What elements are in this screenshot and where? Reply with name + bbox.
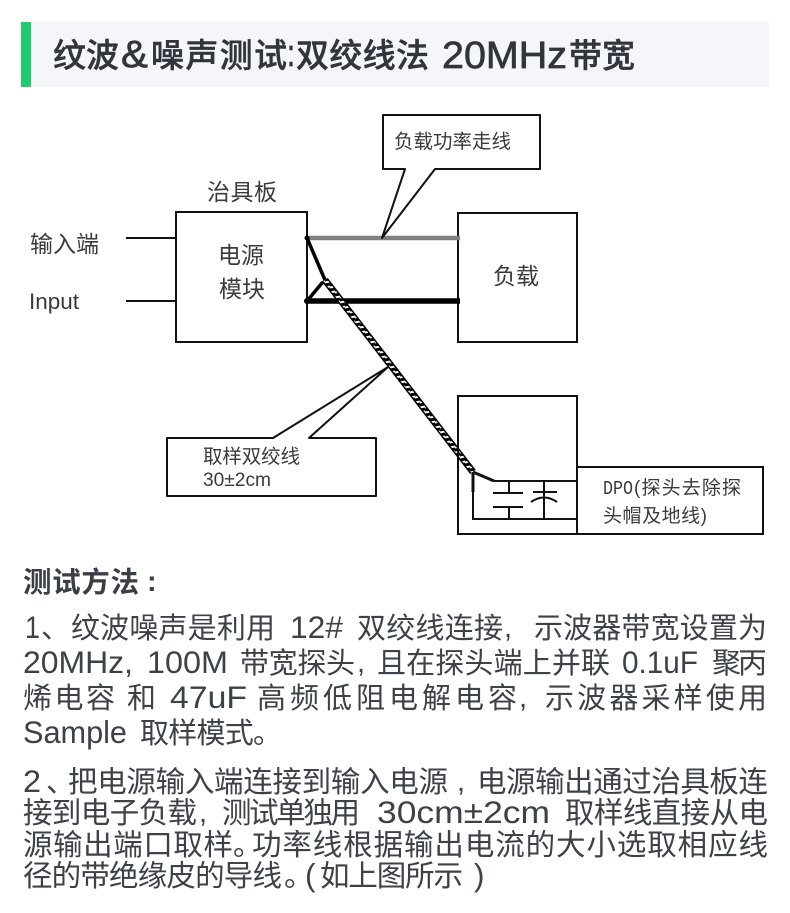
paragraph 2: 。 xyxy=(284,860,314,893)
box: load xyxy=(458,213,577,342)
paragraph 2: 、 xyxy=(46,767,75,799)
heading: test method: 测试方法 xyxy=(23,567,139,599)
paragraph 2: ) xyxy=(474,857,484,893)
paragraph 2: 接到电子负载 xyxy=(23,797,197,830)
box: DPO probe note: 头帽及地线) xyxy=(603,505,707,527)
paragraph 1: 带宽探头 xyxy=(240,647,355,680)
box: power module: 电源 xyxy=(218,242,264,268)
title banner: 带宽 xyxy=(569,37,635,74)
label: fixture board: 治具板 xyxy=(207,179,277,205)
paragraph 1: 100M xyxy=(147,644,228,680)
box: power module xyxy=(176,212,307,342)
paragraph 1: Sample xyxy=(23,714,127,750)
box: power module: 模块 xyxy=(219,276,265,302)
paragraph 2: 源输出端口取样 xyxy=(23,829,233,862)
title banner: 双绞线法 xyxy=(296,37,429,74)
paragraph 2: , xyxy=(199,797,207,829)
paragraph 1: 47uF xyxy=(170,679,247,715)
paragraph 2: 2 xyxy=(23,763,41,799)
callout: sampling twisted pair: 30±2cm xyxy=(203,470,271,491)
input wires xyxy=(126,238,176,301)
callout: sampling twisted pair: 取样双绞线 xyxy=(203,446,300,468)
title banner: 纹波 xyxy=(53,37,119,74)
capacitor circuit xyxy=(473,472,577,519)
box: DPO probe note: DPO xyxy=(603,478,633,500)
title banner xyxy=(21,22,769,87)
paragraph 1: 取样模式。 xyxy=(140,717,282,750)
paragraph 1: 1 xyxy=(25,609,40,645)
circuit diagram xyxy=(29,115,763,534)
paragraph 2: 。 xyxy=(233,829,263,862)
paragraph 1: 且在探头端上并联 xyxy=(377,647,610,680)
paragraph 1: 和 xyxy=(127,683,156,715)
paragraph 2: 取样线直接从电 xyxy=(565,797,768,830)
paragraph 2: 如上图所示 xyxy=(320,860,463,893)
paragraph 2: 径的带绝缘皮的导线 xyxy=(23,860,282,893)
paragraph 1: 聚丙 xyxy=(712,648,767,680)
paragraph 1: , xyxy=(504,612,512,644)
paragraph 2: ( xyxy=(305,857,316,893)
paragraph 2 xyxy=(23,763,768,893)
title banner: & xyxy=(121,34,148,76)
paragraph 2: , xyxy=(457,766,465,798)
paragraph 1: 双绞线连接 xyxy=(357,612,503,645)
paragraph 1: 纹波噪声是利用 xyxy=(71,612,275,645)
paragraph 2: 测试单独用 xyxy=(222,797,360,830)
label: input end: 输入端 xyxy=(30,231,99,257)
heading: test method: : xyxy=(147,566,157,598)
title banner: : xyxy=(287,33,295,75)
label: Input: Input xyxy=(29,289,80,314)
box: oscilloscope xyxy=(458,396,577,534)
box: DPO probe note xyxy=(577,467,763,534)
paragraph 1: 示波器采样使用 xyxy=(545,682,767,715)
title banner: 20MHz xyxy=(442,35,567,77)
paragraph 1: , xyxy=(357,647,365,679)
box: DPO probe note: (探头去除探 xyxy=(634,477,741,499)
callout: load power trace xyxy=(382,115,540,238)
paragraph 1: 、 xyxy=(41,613,70,645)
callout: load power trace: 负载功率走线 xyxy=(394,131,511,153)
paragraph 1 xyxy=(23,609,767,750)
paragraph 1: 20MHz, xyxy=(23,644,133,680)
paragraph 2: 功率线根据输出电流的大小选取相应线 xyxy=(252,829,768,862)
paragraph 2: 把电源输入端连接到输入电源 xyxy=(68,766,448,799)
box: load: 负载 xyxy=(493,263,539,289)
paragraph 1: 高频低阻电解电容 xyxy=(257,682,517,715)
paragraph 1: , xyxy=(519,682,527,714)
paragraph 1: 示波器带宽设置为 xyxy=(534,612,767,645)
load power wires xyxy=(306,238,460,301)
callout: sampling twisted pair xyxy=(167,367,388,496)
paragraph 1: 12# xyxy=(290,609,343,645)
paragraph 1: 烯电容 xyxy=(23,682,115,715)
paragraph 1: 0.1uF xyxy=(622,644,698,680)
title banner: 噪声测试 xyxy=(151,37,287,74)
paragraph 2: 电源输出通过治具板连 xyxy=(477,766,768,799)
twisted pair sampling wire xyxy=(304,236,473,472)
paragraph 2: 30cm±2cm xyxy=(377,794,550,830)
